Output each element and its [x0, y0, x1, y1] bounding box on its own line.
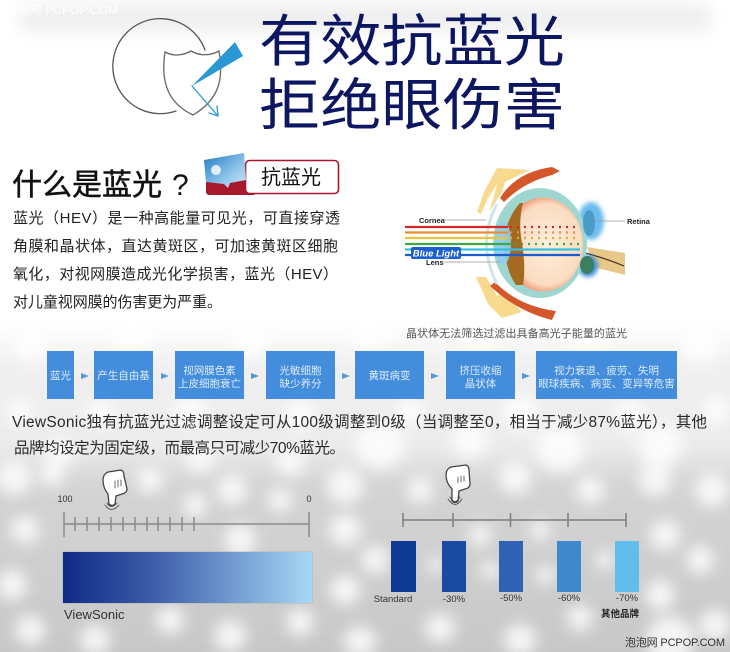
- bar: -70%: -70%: [616, 593, 639, 604]
- bar: -60%: -60%: [558, 593, 581, 604]
- step 1: 蓝光: [50, 369, 71, 382]
- optic nerve: [585, 247, 625, 275]
- text block: blue light explanation: 氧化，对视网膜造成光化学损害，蓝光（HEV）: [13, 266, 338, 283]
- scale: ViewSonic adjustable levels: [64, 512, 309, 537]
- iris: [505, 203, 524, 285]
- bar: Standard: Standard: [374, 594, 412, 605]
- label: lens: Lens: [426, 258, 444, 267]
- light rays: [405, 227, 580, 255]
- caption: eye diagram: 晶状体无法筛选过滤出具备高光子能量的蓝光: [406, 326, 627, 340]
- badge: anti blue light tag: [204, 153, 338, 195]
- label: cornea: [419, 216, 486, 225]
- step 3: 视网膜色素: [183, 364, 236, 377]
- step 4: [266, 351, 335, 399]
- arrow 4: [342, 373, 350, 379]
- lens: [495, 221, 511, 265]
- bar: -30%: -30%: [443, 594, 466, 605]
- arrow 2: [161, 373, 169, 379]
- step 6: 晶状体: [465, 377, 497, 390]
- eyeball interior: [503, 198, 583, 292]
- step 3: [175, 351, 244, 399]
- bar chart: other brand filter levels: [374, 541, 639, 620]
- text block: ViewSonic adjustment description: [12, 413, 707, 457]
- bar: -60%: [557, 541, 581, 604]
- step 4: 缺少养分: [280, 377, 322, 390]
- bar: -50%: [499, 541, 523, 604]
- step 6: [446, 351, 515, 399]
- bar: Standard: [374, 541, 416, 605]
- label: cornea: Cornea: [419, 216, 446, 225]
- icon: pointing hand left: [103, 470, 127, 510]
- step 3: 上皮细胞衰亡: [178, 377, 241, 390]
- cornea bulge: [486, 204, 497, 284]
- step 7: [536, 351, 677, 399]
- scale: other brands fixed levels: [403, 513, 626, 527]
- label: lens: [426, 258, 500, 267]
- watermark bottom-right: 泡泡网 PCPOP.COM: [625, 635, 725, 649]
- step 7: 眼球疾病、病变、变异等危害: [538, 377, 675, 390]
- title: 拒绝眼伤害: [259, 74, 565, 137]
- macula: [583, 210, 595, 236]
- label: ViewSonic: ViewSonic: [64, 607, 125, 622]
- heading: what is blue light: 什么是蓝光: [12, 169, 162, 202]
- text block: ViewSonic adjustment description: 品牌均设定为固定级，而最高只可减少70%蓝光。: [14, 439, 345, 457]
- bar: -70%: [615, 541, 639, 604]
- text block: blue light explanation: 对儿童视网膜的伤害更为严重。: [13, 293, 222, 311]
- badge: anti blue light tag: 抗蓝光: [261, 166, 321, 189]
- icon: shield deflecting blue light: [113, 19, 243, 116]
- icon: pointing hand right: [446, 465, 470, 504]
- watermark top-left: 泡泡网 PCPOP.COM: [5, 3, 118, 17]
- text block: blue light explanation: [13, 210, 340, 311]
- step 7: 视力衰退、疲劳、失明: [554, 364, 659, 377]
- step 1: [47, 351, 74, 399]
- step 6: 挤压收缩: [460, 364, 502, 377]
- label: other brands: 其他品牌: [601, 608, 639, 620]
- scale label: 100: 100: [57, 494, 73, 504]
- label: retina: [595, 217, 651, 226]
- label: retina: Retina: [627, 217, 651, 226]
- step 4: 光敏细胞: [280, 364, 322, 377]
- arrow 6: [522, 373, 530, 379]
- retina glow: [578, 202, 604, 277]
- step 5: [355, 351, 424, 399]
- bar: -50%: -50%: [500, 593, 523, 604]
- text block: blue light explanation: 蓝光（HEV）是一种高能量可见光，可直接穿透: [13, 210, 340, 227]
- scale label: 0: 0: [306, 494, 312, 504]
- step 2: [94, 351, 153, 399]
- bar: -30%: [442, 541, 466, 605]
- text block: blue light explanation: 角膜和晶状体，直达黄斑区，可加速黄斑区细胞: [13, 238, 338, 255]
- upper bone and muscle: [477, 167, 560, 214]
- eyeball sclera: [493, 188, 587, 298]
- arrow 1: [81, 373, 89, 379]
- title: [259, 10, 565, 137]
- flow chart: blue light damage chain: [47, 351, 677, 399]
- arrow 3: [251, 373, 259, 379]
- blue light label: Blue Light: [413, 248, 460, 260]
- diagram: eye cross-section: [405, 167, 651, 320]
- arrow 5: [431, 373, 439, 379]
- step 2: 产生自由基: [97, 369, 150, 382]
- step 5: 黄斑病变: [368, 369, 411, 382]
- gradient bar: ViewSonic: [63, 552, 312, 603]
- ray dots: [510, 227, 580, 244]
- title: 有效抗蓝光: [259, 10, 565, 73]
- text block: ViewSonic adjustment description: ViewSonic独有抗蓝光过滤调整设定可从100级调整到0级（当调整至0，相当于减少87%蓝光），其他: [12, 413, 707, 431]
- heading: what is blue light: ?: [172, 169, 189, 202]
- lower bone and muscle: [476, 277, 556, 320]
